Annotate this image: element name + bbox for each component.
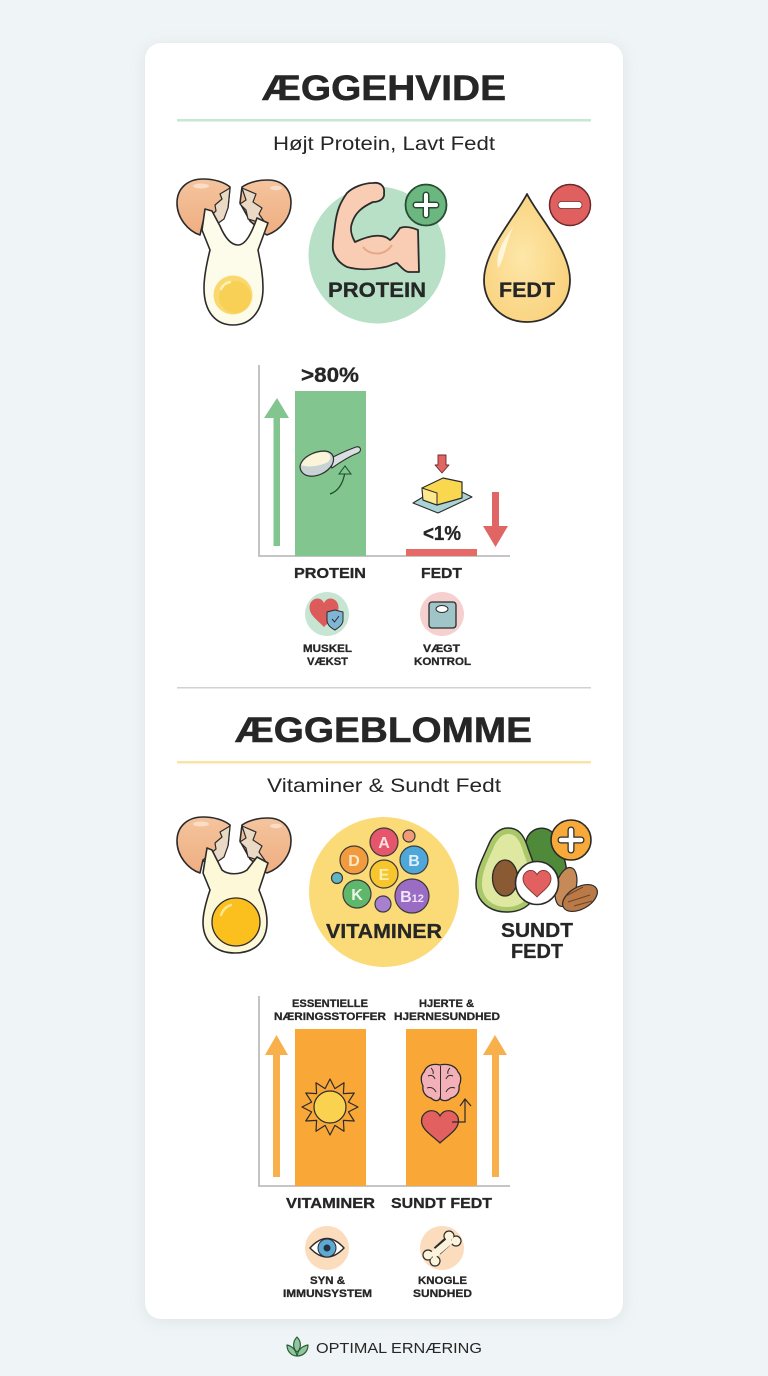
left up arrow xyxy=(265,1035,288,1177)
label: essentielle næringsstoffer: ESSENTIELLE xyxy=(292,998,368,1010)
value: <1%: <1% xyxy=(423,523,461,545)
benefit: vægt kontrol: VÆGT xyxy=(423,643,460,655)
protein label: PROTEIN xyxy=(328,279,426,302)
title: æggeblomme: ÆGGEBLOMME xyxy=(235,711,532,750)
icon: vitamin circle: D xyxy=(348,853,360,870)
up arrow xyxy=(264,398,289,546)
label: essentielle næringsstoffer xyxy=(274,998,386,1023)
minus badge xyxy=(550,184,590,226)
benefit: syn og immunsystem: IMMUNSYSTEM xyxy=(283,1288,372,1300)
icon: protein circle xyxy=(308,183,446,324)
yellow rule xyxy=(177,761,591,764)
right up arrow xyxy=(483,1035,507,1177)
label: fedt: FEDT xyxy=(421,565,462,582)
card xyxy=(145,43,623,1319)
bar chart: vitaminer og sundt fedt xyxy=(259,996,510,1212)
plus badge xyxy=(551,820,591,860)
label: protein: PROTEIN xyxy=(294,565,366,582)
footer xyxy=(287,1337,482,1357)
icon: butter xyxy=(413,455,472,513)
label: hjerte og hjernesundhed xyxy=(394,998,500,1023)
value: >80%: >80% xyxy=(301,364,359,387)
icon: vitamin circle: B xyxy=(408,853,420,870)
icon: brain xyxy=(421,1064,461,1101)
label: vitaminer: VITAMINER xyxy=(286,1195,375,1212)
benefit: muskel vækst: VÆKST xyxy=(307,656,348,668)
divider xyxy=(177,687,591,688)
benefit: knogle sundhed: SUNDHED xyxy=(413,1288,472,1300)
subtitle: Vitaminer & Sundt Fedt xyxy=(267,776,502,797)
label: hjerte og hjernesundhed: HJERNESUNDHED xyxy=(394,1011,500,1023)
icon: scoop xyxy=(300,447,360,494)
bar: fedt xyxy=(406,549,477,556)
bar: sundt fedt xyxy=(406,1029,477,1186)
benefit: knogle sundhed: KNOGLE xyxy=(418,1275,467,1287)
icon: cracked egg with golden yolk xyxy=(177,817,291,953)
benefit: knogle sundhed xyxy=(413,1226,472,1300)
label: sundt fedt: SUNDT FEDT xyxy=(391,1195,492,1212)
bar: protein xyxy=(295,391,366,556)
bar chart: protein vs fedt xyxy=(259,364,510,582)
panel: æggehvide xyxy=(177,69,591,668)
benefit: syn og immunsystem: SYN & xyxy=(310,1275,345,1287)
fedt label: FEDT xyxy=(499,279,555,302)
icon: vitamin circle: B12 xyxy=(400,889,424,906)
icon: sun xyxy=(302,1079,358,1135)
benefit: muskel vækst: MUSKEL xyxy=(303,643,352,655)
benefit: muskel vækst xyxy=(303,592,352,668)
label: essentielle næringsstoffer: NÆRINGSSTOFFER xyxy=(274,1011,386,1023)
icon: heart with arrow xyxy=(422,1099,471,1143)
bar: vitaminer xyxy=(295,1029,366,1186)
icon: vitamin circle: A xyxy=(378,835,390,852)
brand name: OPTIMAL ERNÆRING xyxy=(316,1340,482,1357)
green rule xyxy=(177,119,591,122)
icon: vitamin circle xyxy=(309,817,459,967)
benefit: syn og immunsystem xyxy=(283,1226,372,1300)
axes xyxy=(259,996,510,1186)
down arrow xyxy=(483,492,508,547)
icon: leaves xyxy=(287,1337,308,1356)
benefit: vægt kontrol xyxy=(414,592,471,668)
sundt fedt label: SUNDT xyxy=(501,920,573,942)
plus badge xyxy=(406,184,446,226)
vitamin bubbles xyxy=(332,828,429,913)
icon: vitamin circle: K xyxy=(351,887,363,904)
icon: fat drop xyxy=(484,184,590,322)
icon: cracked egg with pale yolk xyxy=(177,179,291,325)
panel: æggeblomme xyxy=(177,711,602,1300)
title: æggehvide: ÆGGEHVIDE xyxy=(262,69,506,108)
axes xyxy=(259,365,510,556)
subtitle: Højt Protein, Lavt Fedt xyxy=(273,134,496,155)
icon: healthy fats: FEDT xyxy=(511,941,563,963)
vitaminer label: VITAMINER xyxy=(326,921,443,943)
label: hjerte og hjernesundhed: HJERTE & xyxy=(419,998,474,1010)
icon: healthy fats xyxy=(476,820,602,963)
icon: vitamin circle: E xyxy=(379,867,390,884)
benefit: vægt kontrol: KONTROL xyxy=(414,656,471,668)
